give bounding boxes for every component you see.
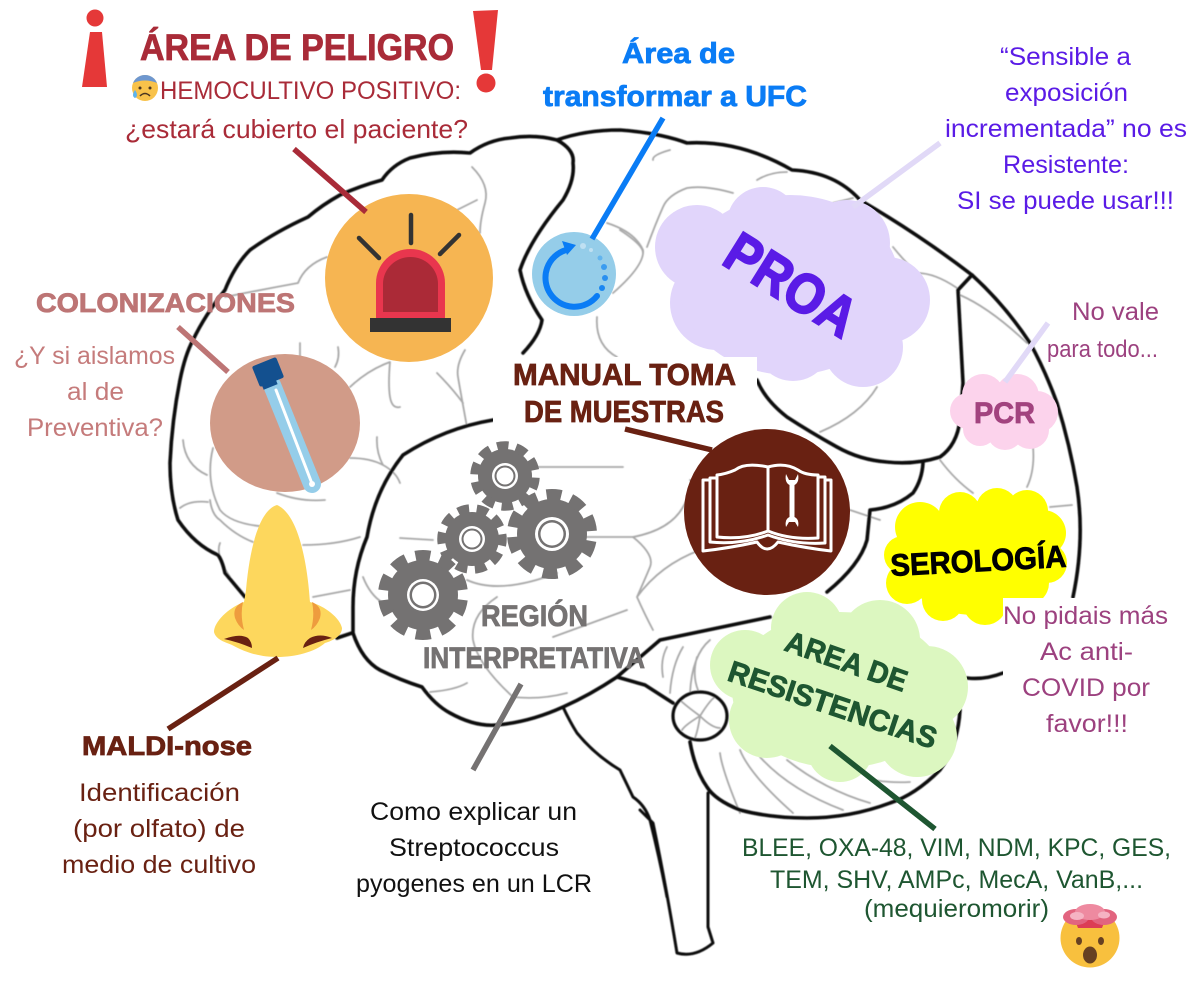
gyri fine lines xyxy=(180,150,1072,813)
frontal operculum xyxy=(757,275,972,463)
icon: inverted exclamation xyxy=(82,10,107,87)
text: resistance list: TEM, SHV, AMPc, MecA, VanB,... xyxy=(770,866,1143,894)
gear large left xyxy=(380,552,466,638)
central sulcus xyxy=(520,140,573,353)
text: PCR note: para todo... xyxy=(1047,336,1158,363)
icon: exclamation xyxy=(473,10,498,92)
connector lines xyxy=(168,118,1048,829)
text: resistance list: BLEE, OXA-48, VIM, NDM, KPC, GES, xyxy=(742,834,1171,862)
outer brain outline xyxy=(170,130,1080,597)
text: serología note: favor!!! xyxy=(1046,710,1128,738)
icon: alarm siren xyxy=(325,194,493,362)
label: PROA: PROA xyxy=(714,220,869,349)
gear large right xyxy=(507,489,597,579)
text: sensible note xyxy=(945,43,1187,215)
label: PCR: PCR xyxy=(974,397,1035,430)
temporal lobe xyxy=(353,420,770,725)
mask behind manual title xyxy=(493,357,757,437)
icon: blood culture tube xyxy=(210,354,360,492)
cloud: PCR xyxy=(950,374,1058,450)
text: colonizaciones question: al de xyxy=(67,378,124,406)
gear small top xyxy=(473,444,537,508)
cloud: serología xyxy=(884,488,1067,625)
text: MALDI description xyxy=(62,779,256,879)
title: danger area xyxy=(82,10,498,92)
heading: manual: MANUAL TOMA xyxy=(513,357,736,392)
text: sensible note: SI se puede usar!!! xyxy=(957,187,1174,215)
text: sensible note: “Sensible a xyxy=(1000,43,1131,71)
text: colonizaciones question: Preventiva? xyxy=(27,414,163,442)
text: interpretive description xyxy=(356,798,592,898)
text: colonizaciones question: ¿Y si aislamos xyxy=(14,342,175,370)
text: interpretive description: pyogenes en un LCR xyxy=(356,870,592,898)
heading: UFC area: transformar a UFC xyxy=(543,81,807,113)
mask behind serología note xyxy=(1003,598,1175,745)
text: serología note: Ac anti- xyxy=(1040,638,1133,666)
text: MALDI description: medio de cultivo xyxy=(62,851,256,879)
text: MALDI description: Identificación xyxy=(79,779,240,807)
text: PCR note xyxy=(1047,298,1159,363)
text: interpretive description: Como explicar un xyxy=(370,798,577,826)
label: interpretive region xyxy=(423,599,645,675)
text: colonizaciones question xyxy=(14,342,175,442)
heading: UFC area xyxy=(543,36,807,113)
cloud: resistencias xyxy=(710,592,968,782)
icon: nose xyxy=(214,505,342,657)
icon: anxious face xyxy=(132,75,158,101)
text: sensible note: exposición xyxy=(1005,79,1128,107)
text: positive blood culture xyxy=(125,75,468,144)
gear small middle xyxy=(438,505,506,573)
label: interpretive region: REGIÓN xyxy=(481,599,588,633)
label: resistance area: AREA DE xyxy=(781,625,911,699)
label: resistance area: RESISTENCIAS xyxy=(724,655,941,756)
text: serología note: No pidais más xyxy=(1003,602,1168,630)
text: MALDI description: (por olfato) de xyxy=(73,815,245,843)
icon: exploding head emoji xyxy=(1060,904,1120,968)
text: resistance list xyxy=(742,834,1171,923)
text: sensible note: incrementada” no es xyxy=(945,115,1187,143)
text: resistance list: (mequieromorir) xyxy=(864,895,1049,923)
heading: colonizaciones: COLONIZACIONES xyxy=(36,288,295,318)
cloud: PROA xyxy=(655,187,930,387)
text: interpretive description: Streptococcus xyxy=(389,834,559,862)
text: serología note: COVID por xyxy=(1022,674,1150,702)
icon: refresh cycle circle xyxy=(532,232,616,316)
brain stem xyxy=(563,707,713,954)
text: positive blood culture: HEMOCULTIVO POSITIVO: xyxy=(160,77,461,105)
brain illustration xyxy=(170,130,1080,954)
text: sensible note: Resistente: xyxy=(1003,151,1129,179)
label: serología: SEROLOGÍA xyxy=(890,539,1067,583)
icon: manual book with wrench xyxy=(684,429,850,595)
text: positive blood culture: ¿estará cubierto el paciente? xyxy=(125,114,468,144)
text: PCR note: No vale xyxy=(1072,298,1159,326)
heading: MALDI-nose: MALDI-nose xyxy=(82,731,252,761)
icon: gears xyxy=(380,444,597,638)
heading: ÁREA DE PELIGRO xyxy=(140,27,454,68)
label: interpretive region: INTERPRETATIVA xyxy=(423,642,645,675)
heading: UFC area: Área de xyxy=(622,36,735,70)
text: serología note xyxy=(1003,602,1168,738)
heading: manual xyxy=(513,357,736,429)
heading: manual: DE MUESTRAS xyxy=(524,394,724,429)
cerebellum xyxy=(690,710,960,818)
